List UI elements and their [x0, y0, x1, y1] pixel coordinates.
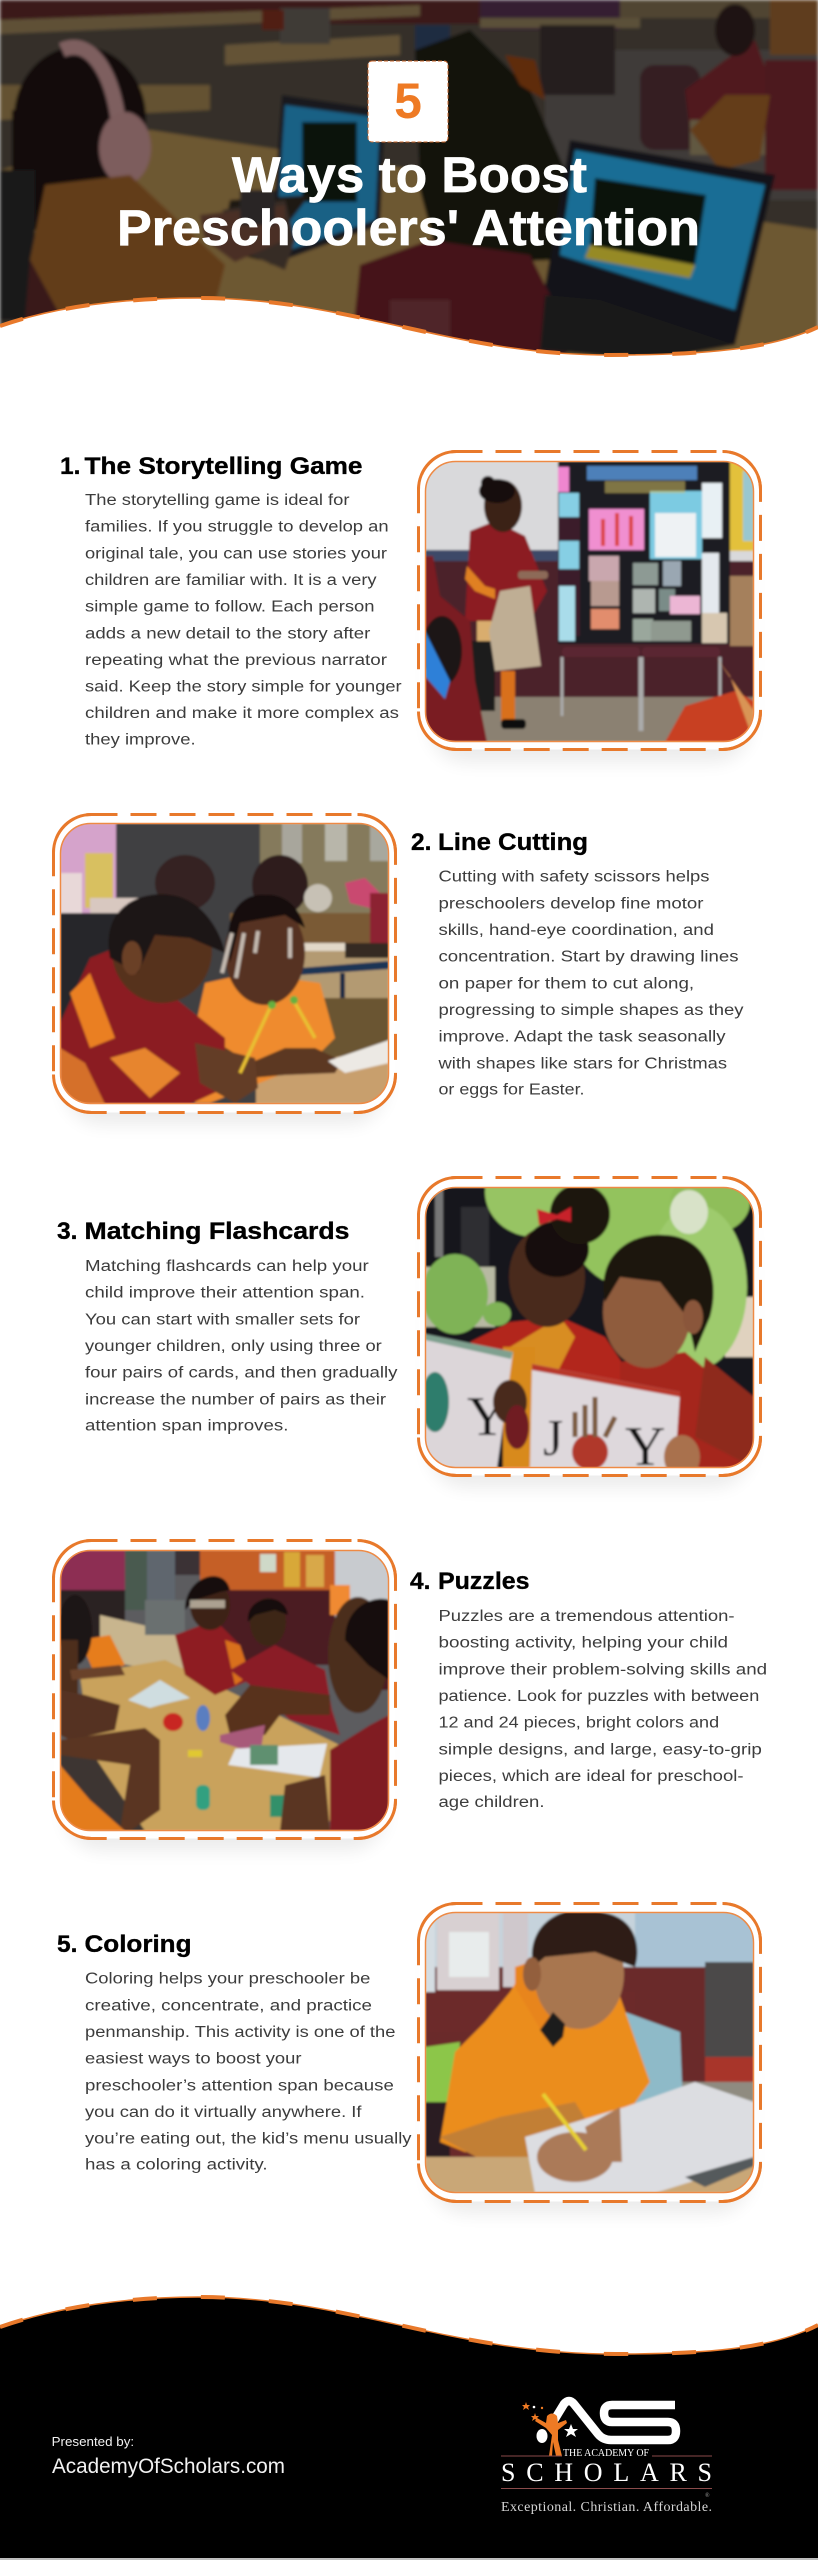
text block: storytelling game: families. If you struggle to develop an — [85, 519, 389, 536]
text block: line cutting: preschoolers develop fine motor — [438, 895, 704, 912]
heading: line cutting: Line Cutting — [438, 829, 588, 856]
text block: matching flashcards: four pairs of cards, and then gradually — [85, 1365, 398, 1382]
logo: the academy of scholars: SCHOLARS — [501, 2458, 712, 2487]
heading: storytelling game: The Storytelling Game — [84, 453, 362, 480]
text block: line cutting: skills, hand-eye coordination, and — [438, 922, 714, 939]
title: Ways to Boost — [232, 147, 587, 203]
text block: puzzles: Puzzles are a tremendous attention- — [438, 1608, 734, 1625]
heading: coloring: 5. — [57, 1931, 77, 1958]
text block: line cutting: on paper for them to cut along, — [438, 975, 694, 992]
heading: puzzles: 4. — [410, 1568, 430, 1595]
text block: storytelling game: children and make it more complex as — [85, 705, 399, 722]
text block: storytelling game: The storytelling game is ideal for — [85, 492, 350, 509]
header photo banner — [0, 0, 818, 360]
photo frame: girls holding flashcards: J — [543, 1410, 563, 1467]
text block: matching flashcards: You can start with smaller sets for — [85, 1311, 360, 1328]
title: Preschoolers' Attention — [117, 200, 700, 256]
text block: coloring: easiest ways to boost your — [85, 2051, 302, 2068]
photo frame: children writing at desk — [54, 814, 396, 1124]
text block: puzzles: improve their problem-solving skills and — [438, 1661, 767, 1678]
text block: puzzles: pieces, which are ideal for preschool- — [438, 1768, 744, 1785]
text block: coloring: Coloring helps your preschooler be — [85, 1971, 370, 1988]
text block: line cutting: progressing to simple shapes as they — [438, 1002, 744, 1019]
text block: storytelling game: children are familiar with. It is a very — [85, 572, 377, 589]
text block: line cutting: improve. Adapt the task seasonally — [438, 1029, 726, 1046]
panel: line cutting — [54, 814, 744, 1124]
text block: puzzles: boosting activity, helping your child — [438, 1635, 728, 1652]
text block: coloring — [85, 1971, 412, 2174]
panel: puzzles — [54, 1540, 767, 1850]
text block: line cutting: Cutting with safety scissors helps — [438, 869, 710, 886]
text block: storytelling game: they improve. — [85, 732, 196, 749]
text block: line cutting — [437, 869, 744, 1098]
text block: storytelling game: original tale, you can use stories your — [85, 545, 387, 562]
panel: coloring — [57, 1904, 760, 2213]
title — [117, 147, 700, 256]
text block: line cutting: with shapes like stars for Christmas — [437, 1055, 727, 1072]
presented by text: Presented by: — [52, 2434, 134, 2449]
photo frame: group working on puzzle at table — [54, 1540, 396, 1850]
photo frame: girls holding flashcards — [418, 1147, 760, 1487]
header wave edge — [0, 298, 818, 355]
text block: puzzles — [438, 1608, 767, 1811]
text block: coloring: preschooler’s attention span because — [85, 2077, 394, 2094]
logo: the academy of scholars: THE ACADEMY OF — [563, 2447, 649, 2459]
text block: storytelling game: repeating what the previous narrator — [85, 652, 387, 669]
text block: coloring: penmanship. This activity is one of the — [85, 2024, 395, 2041]
text block: matching flashcards: Matching flashcards can help your — [85, 1258, 369, 1275]
badge: number 5: 5 — [394, 73, 422, 129]
heading: coloring: Coloring — [84, 1931, 192, 1958]
heading: storytelling game: 1. — [60, 453, 80, 480]
heading: puzzles: Puzzles — [438, 1568, 530, 1595]
text block: matching flashcards — [85, 1258, 398, 1434]
text block: storytelling game: adds a new detail to the story after — [85, 625, 370, 642]
photo frame: girl presenting science board — [418, 452, 760, 762]
text block: line cutting: or eggs for Easter. — [438, 1081, 584, 1098]
text block: matching flashcards: attention span improves. — [85, 1417, 288, 1434]
text block: matching flashcards: younger children, only using three or — [85, 1338, 382, 1355]
panel: matching flashcards — [57, 1147, 760, 1487]
presented by text — [52, 2434, 285, 2478]
text block: line cutting: concentration. Start by drawing lines — [438, 949, 739, 966]
text block: coloring: you’re eating out, the kid’s menu usually — [85, 2131, 412, 2148]
heading: matching flashcards: Matching Flashcards — [84, 1218, 350, 1245]
text block: puzzles: age children. — [438, 1794, 544, 1811]
text block: matching flashcards: child improve their attention span. — [85, 1285, 365, 1302]
logo: the academy of scholars: Exceptional. Christian. Affordable. — [501, 2500, 712, 2515]
text block: coloring: has a coloring activity. — [85, 2157, 268, 2174]
photo frame: boy coloring in orange shirt — [418, 1904, 760, 2213]
text block: puzzles: 12 and 24 pieces, bright colors and — [438, 1715, 719, 1732]
logo: the academy of scholars: ® — [705, 2492, 710, 2499]
text block: matching flashcards: increase the number of pairs as their — [85, 1391, 386, 1408]
text block: puzzles: patience. Look for puzzles with between — [438, 1688, 759, 1705]
badge: number 5 — [368, 61, 448, 142]
logo: the academy of scholars — [501, 2401, 712, 2515]
panel: the storytelling game — [60, 452, 760, 762]
photo frame: girls holding flashcards: Y — [625, 1416, 665, 1478]
text block: storytelling game — [85, 492, 402, 749]
text block: storytelling game: simple game to follow. Each person — [85, 599, 374, 616]
heading: matching flashcards: 3. — [57, 1218, 77, 1245]
presented by text: AcademyOfScholars.com — [52, 2455, 285, 2478]
photo frame: girls holding flashcards: Y — [467, 1386, 507, 1448]
text block: puzzles: simple designs, and large, easy-to-grip — [438, 1741, 762, 1758]
text block: coloring: creative, concentrate, and practice — [85, 1997, 372, 2014]
heading: line cutting: 2. — [411, 829, 431, 856]
text block: storytelling game: said. Keep the story simple for younger — [85, 679, 402, 696]
text block: coloring: you can do it virtually anywhere. If — [85, 2104, 362, 2121]
footer band — [0, 2297, 818, 2560]
